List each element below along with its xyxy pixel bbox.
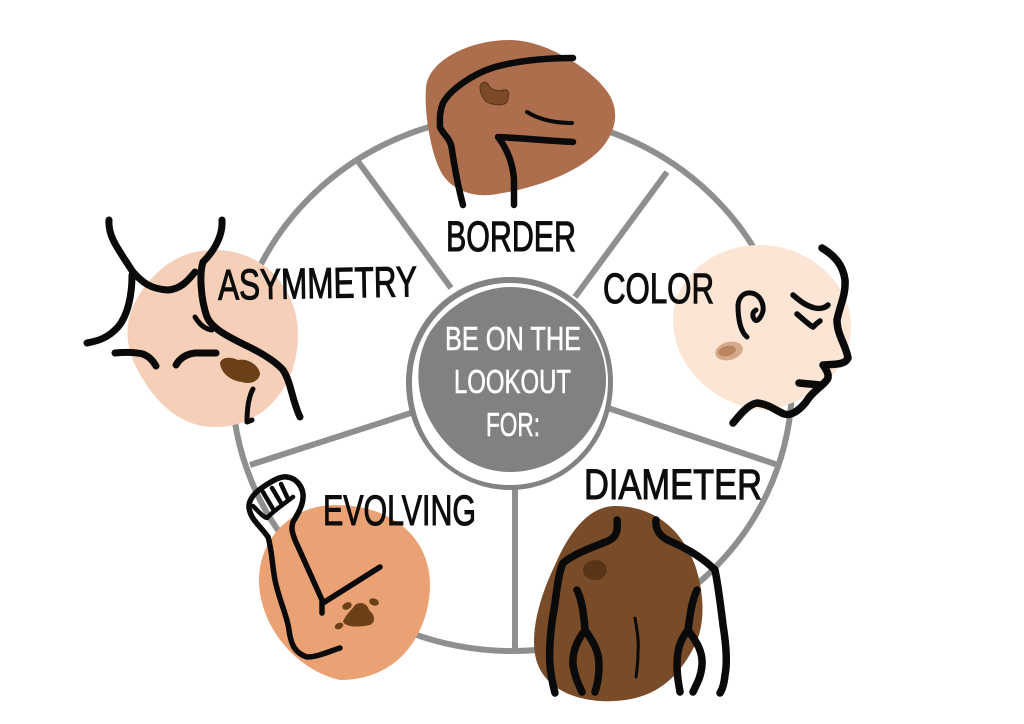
icon: shoulder and arm	[440, 58, 573, 205]
badge text: BE ON THE	[445, 320, 581, 357]
panel: diameter	[534, 461, 762, 701]
badge fill	[418, 287, 606, 472]
icon: raised arm and fist	[249, 477, 380, 657]
icon: evolving mole	[334, 597, 380, 631]
panel: border	[426, 40, 615, 261]
badge text: LOOKOUT	[454, 363, 571, 400]
panel: evolving	[249, 477, 476, 680]
icon: face profile	[733, 248, 848, 423]
badge text: FOR:	[486, 406, 540, 443]
wheel spokes	[250, 160, 781, 650]
badge text	[445, 320, 581, 443]
icon: back torso	[550, 520, 726, 693]
icon: color mole	[713, 339, 745, 363]
skin blob: asymmetry	[127, 250, 298, 427]
panel: asymmetry	[87, 220, 417, 427]
wheel diagram	[232, 115, 792, 651]
label: diameter: DIAMETER	[584, 461, 762, 509]
icon: asymmetry mole	[220, 358, 260, 383]
skin blob: color	[673, 245, 851, 410]
skin blob: diameter	[534, 506, 702, 701]
label: asymmetry: ASYMMETRY	[218, 258, 417, 310]
label: color: COLOR	[603, 265, 714, 313]
label: evolving: EVOLVING	[323, 487, 476, 535]
center badge	[406, 277, 613, 490]
wheel outer rim	[232, 115, 792, 651]
label: border: BORDER	[446, 213, 576, 261]
skin blob: evolving	[259, 505, 430, 680]
icon: border mole	[480, 82, 509, 105]
icon: diameter mole	[583, 560, 607, 580]
badge outer ring	[406, 277, 613, 490]
badge white ring	[412, 283, 608, 485]
skin blob: border	[426, 40, 615, 195]
icon: neck and shoulder	[87, 220, 300, 422]
panel: color	[603, 245, 851, 423]
